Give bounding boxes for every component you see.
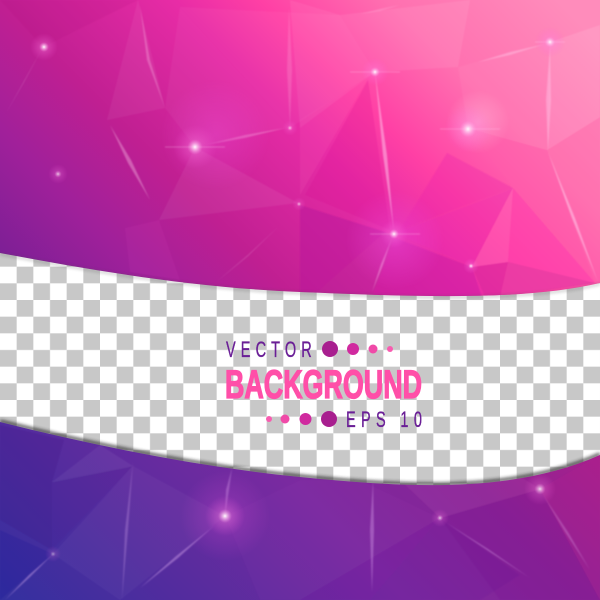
edge shadow: bottom wave bbox=[0, 421, 600, 484]
light streaks bbox=[5, 462, 590, 600]
text: EPS 10: EPS 10 bbox=[346, 407, 422, 432]
dots: upper row bbox=[322, 341, 393, 357]
title block bbox=[225, 337, 422, 432]
light streaks bbox=[5, 5, 598, 292]
text: VECTOR: VECTOR bbox=[226, 337, 312, 362]
dots: lower row bbox=[266, 411, 337, 427]
panel: bottom polygon background bbox=[0, 410, 600, 600]
panel: top polygon background bbox=[0, 0, 600, 310]
edge shadow: top wave bbox=[0, 254, 600, 297]
text: BACKGROUND: BACKGROUND bbox=[225, 363, 422, 407]
glow and sparkle points bbox=[45, 471, 556, 562]
glow and sparkle points bbox=[30, 27, 565, 290]
